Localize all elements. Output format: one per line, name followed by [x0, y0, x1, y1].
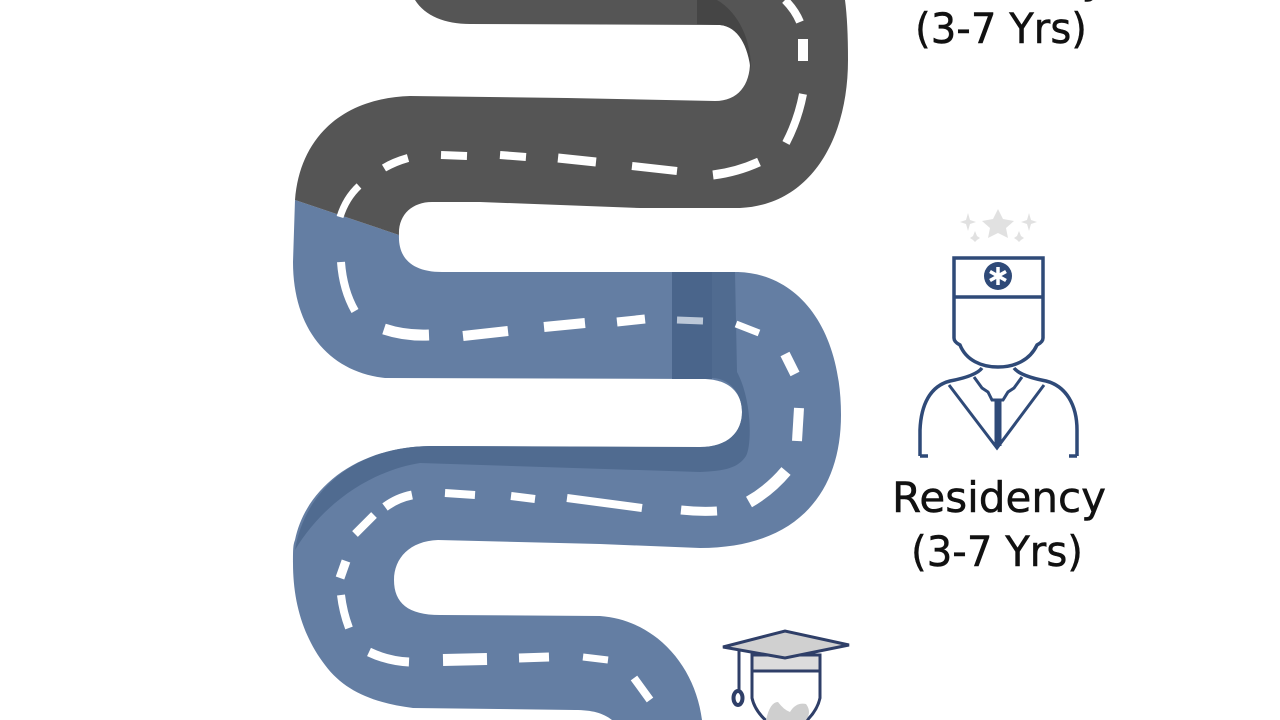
label: residency: (3-7 Yrs): [911, 527, 1083, 576]
label: residency: Residency: [892, 473, 1106, 522]
icon: mortarboard: [723, 631, 849, 658]
icon: shoulders: [920, 368, 1077, 456]
icon: tassel: [738, 651, 740, 690]
lane markings: dark road: [340, 0, 803, 217]
road: dark section: [295, 0, 848, 235]
lane markings: blue road: [340, 262, 799, 700]
icon: tie: [994, 400, 1002, 446]
icon: collar: [949, 377, 1044, 448]
label: residency: [892, 473, 1106, 576]
icon: rank stars: [960, 209, 1037, 242]
icon: grey beard: [766, 702, 809, 720]
icon: cap and face: [954, 258, 1043, 367]
icon: resident doctor: [920, 209, 1077, 456]
label: upper duration: (3-7 Yrs): [915, 4, 1087, 53]
icon: face: [752, 671, 820, 720]
icon: cap band: [752, 655, 820, 671]
icon: medical graduate: [723, 631, 849, 720]
icon: cap badge: [984, 262, 1012, 290]
shadow: dark road overpass: [697, 0, 751, 72]
road: blue section: [293, 200, 841, 720]
shadow: road overpass bands: [295, 272, 750, 550]
